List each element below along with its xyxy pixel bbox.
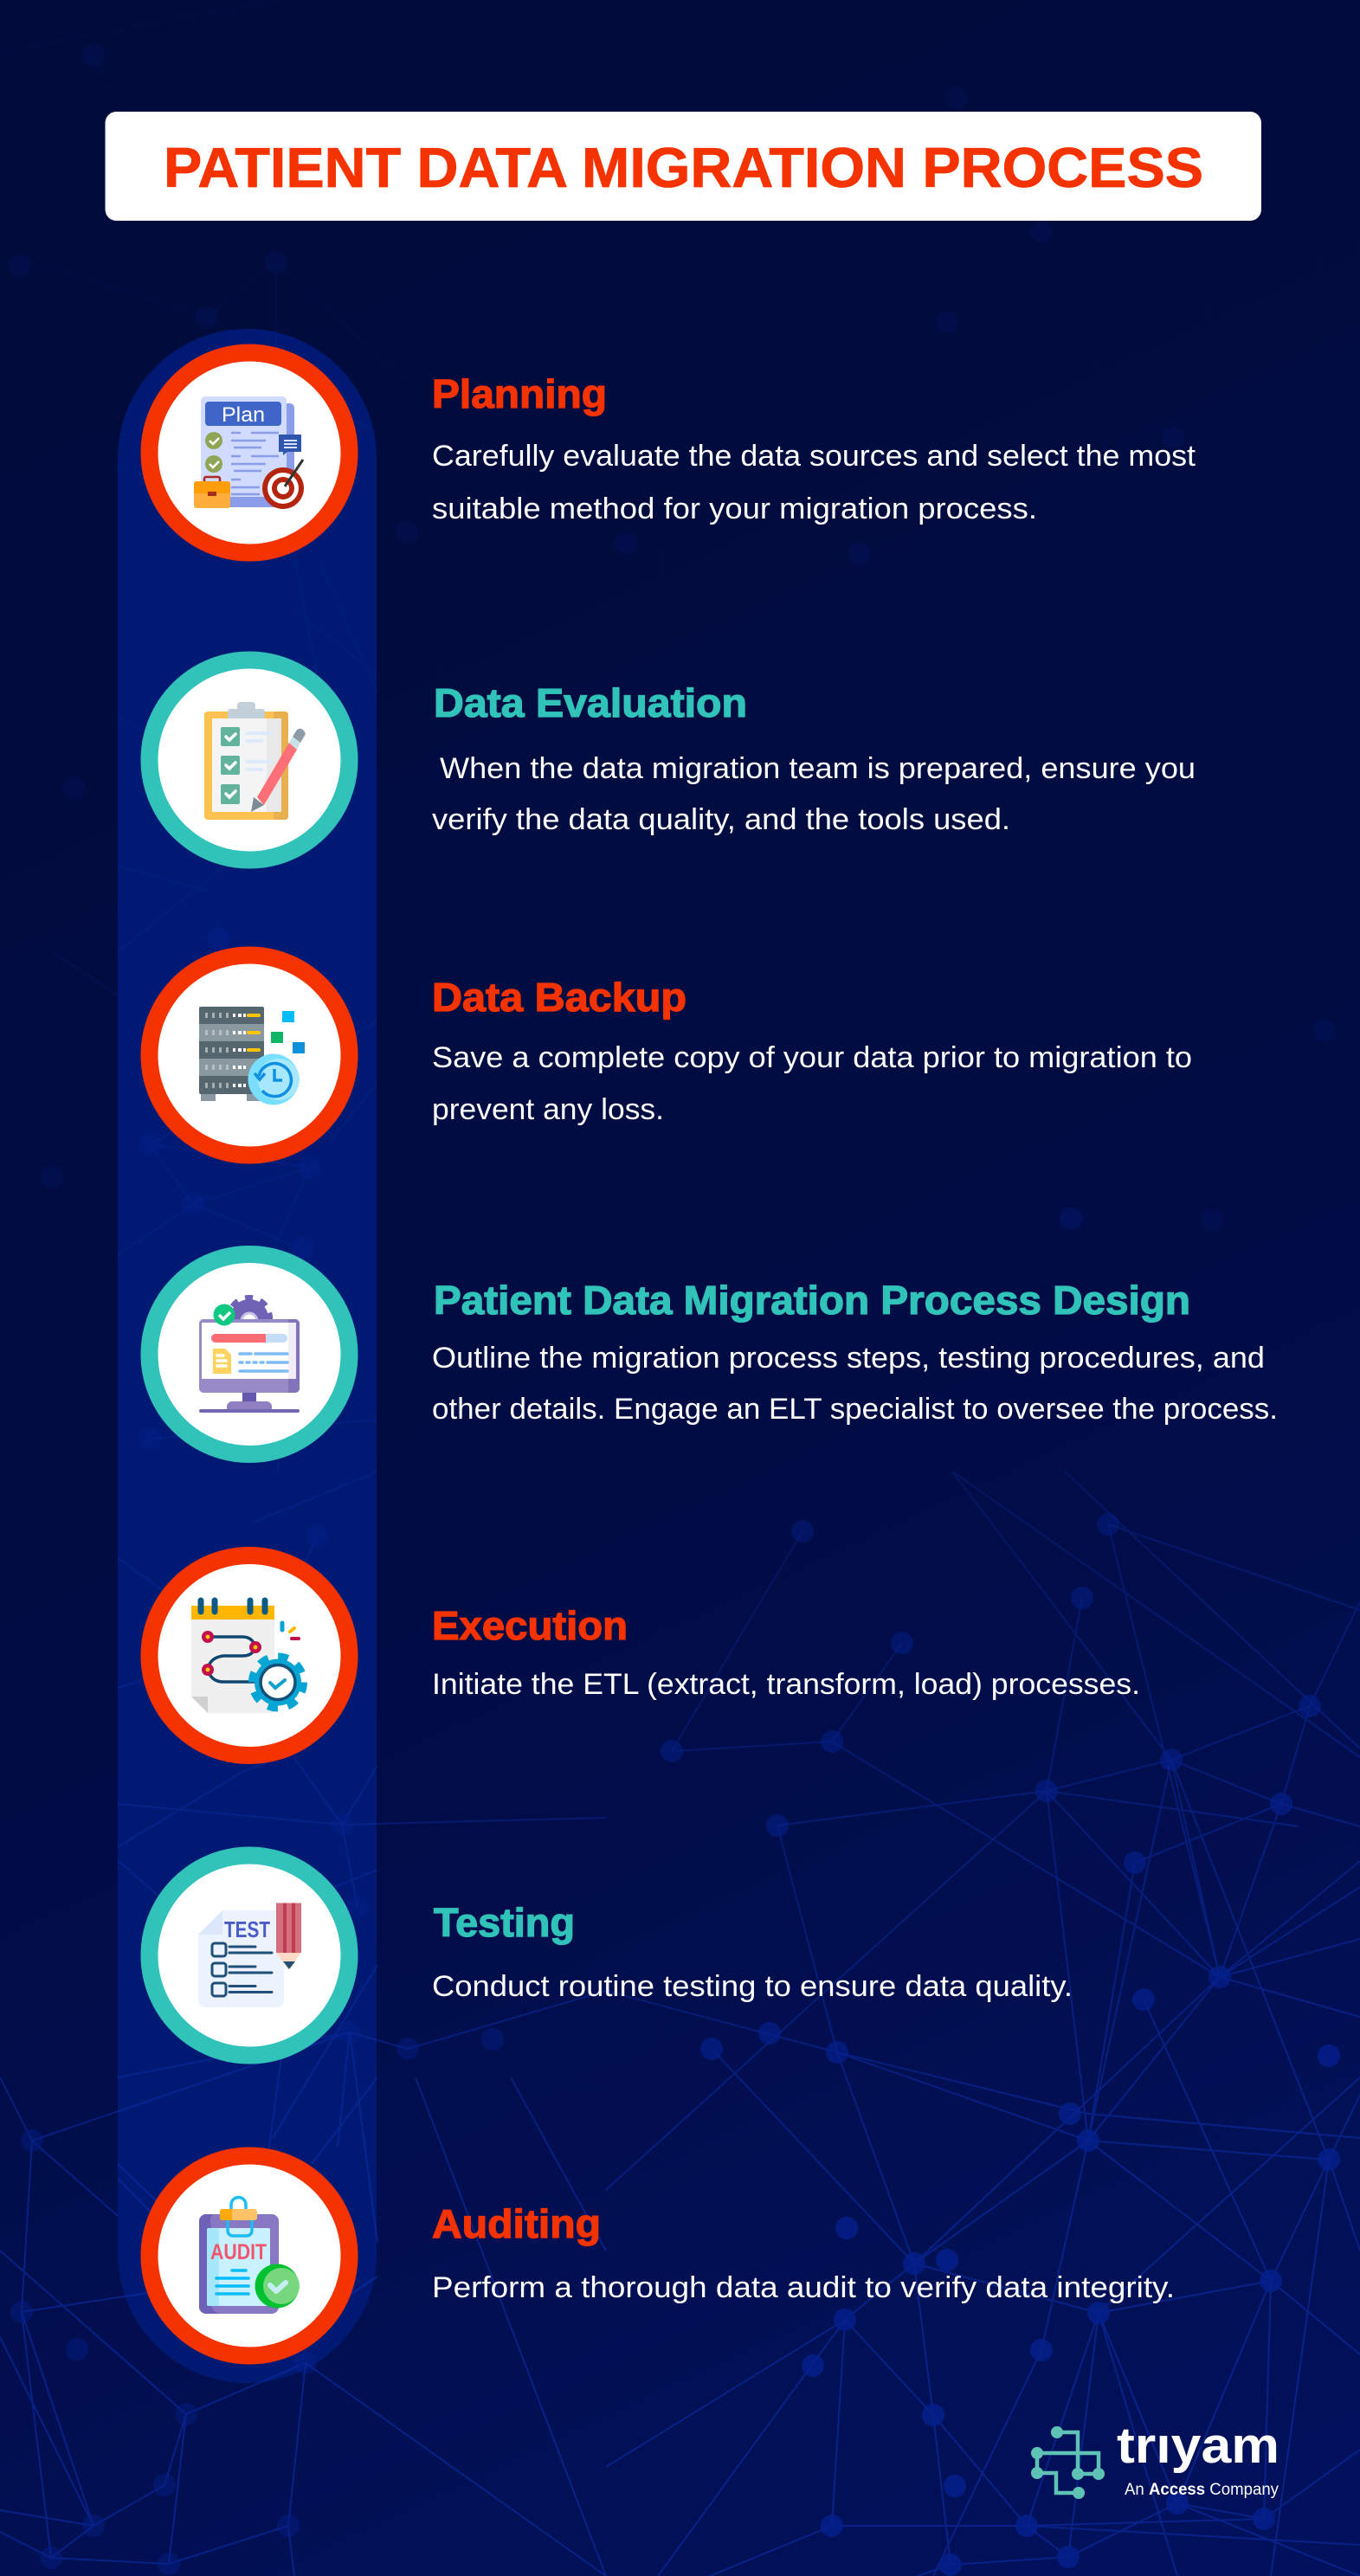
heading: process design: Patient Data Migration Process Design xyxy=(434,1278,1190,1323)
heading: data backup: Data Backup xyxy=(432,975,686,1020)
text: planning: suitable method for your migration process. xyxy=(432,493,1037,525)
icon: test sheet and pencil: TEST xyxy=(224,1916,270,1942)
text: data evaluation xyxy=(432,752,1196,836)
icon: monitor with gear xyxy=(199,1298,300,1413)
heading: auditing: Auditing xyxy=(432,2201,601,2246)
icon: clipboard and pencil xyxy=(204,702,306,820)
icon: logo circuit mark xyxy=(1031,2426,1105,2499)
text: planning: Carefully evaluate the data sources and select the most xyxy=(432,440,1196,473)
icon: audit clipboard: AUDIT xyxy=(210,2240,267,2264)
text: auditing: Perform a thorough data audit to verify data integrity. xyxy=(432,2271,1175,2304)
step 2: data evaluation xyxy=(149,660,1196,860)
step 6: testing xyxy=(149,1856,1073,2055)
vertical track xyxy=(118,329,377,2383)
text: process design xyxy=(432,1342,1278,1426)
text: planning xyxy=(432,440,1196,525)
badge: data backup xyxy=(149,956,350,1155)
step 7: auditing xyxy=(149,2155,1175,2356)
text: data backup: prevent any loss. xyxy=(432,1093,664,1126)
heading: planning: Planning xyxy=(432,371,607,416)
text: data backup xyxy=(432,1041,1192,1126)
heading: data evaluation: Data Evaluation xyxy=(434,680,747,725)
logo: triyam xyxy=(1031,2418,1279,2499)
icon: audit clipboard xyxy=(199,2197,300,2314)
title banner xyxy=(106,112,1261,221)
logo wordmark: trıyam xyxy=(1117,2418,1279,2474)
step 3: data backup xyxy=(149,956,1192,1155)
text: data evaluation: When the data migration team is prepared, ensure you xyxy=(440,752,1196,785)
title: PATIENT DATA MIGRATION PROCESS xyxy=(164,136,1203,199)
text: process design: Outline the migration process steps, testing procedures, and xyxy=(432,1342,1265,1375)
heading: testing: Testing xyxy=(434,1900,575,1945)
badge: testing xyxy=(149,1856,350,2055)
icon: test sheet and pencil xyxy=(198,1903,301,2007)
icon: server backup xyxy=(199,1007,305,1104)
badge: data evaluation xyxy=(149,660,350,860)
icon: plan document xyxy=(194,396,304,509)
heading: execution: Execution xyxy=(432,1603,628,1648)
step 4: process design xyxy=(149,1254,1278,1454)
badge: planning xyxy=(149,353,350,552)
text: data evaluation: verify the data quality, and the tools used. xyxy=(432,803,1010,836)
text: data backup: Save a complete copy of your data prior to migration to xyxy=(432,1041,1192,1074)
step 1: planning xyxy=(149,353,1196,552)
text: testing: Conduct routine testing to ensure data quality. xyxy=(432,1970,1073,2003)
badge: auditing xyxy=(149,2155,350,2356)
icon: plan document: Plan xyxy=(222,403,265,427)
text: process design: other details. Engage an ELT specialist to oversee the process. xyxy=(432,1393,1278,1426)
step 5: execution xyxy=(149,1555,1140,1755)
text: execution: Initiate the ETL (extract, transform, load) processes. xyxy=(432,1668,1140,1701)
logo tagline: An Access Company xyxy=(1125,2481,1279,2499)
badge: process design xyxy=(149,1254,350,1454)
icon: calendar workflow gear xyxy=(191,1600,304,1713)
badge: execution xyxy=(149,1555,350,1755)
